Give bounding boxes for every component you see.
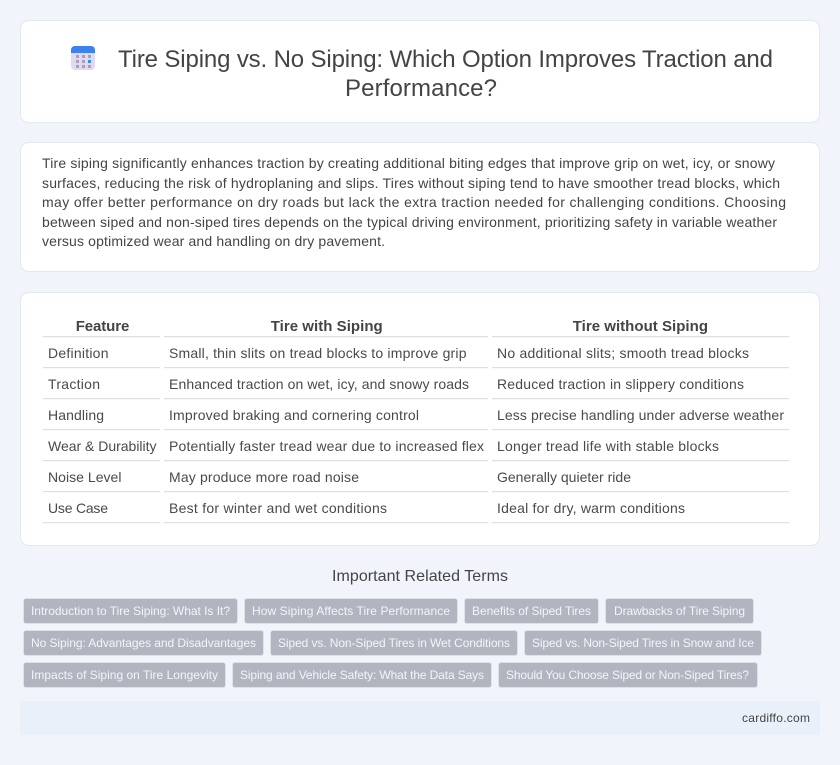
tag: performance: How Siping Affects Tire Performance [252, 604, 450, 618]
row: noise level [48, 469, 631, 485]
title: Performance? [345, 75, 497, 102]
intro paragraph: Tire siping significantly enhances traction by creating additional biting edges that improve grip on wet, icy, or snowy [42, 155, 775, 171]
row: noise level: Generally quieter ride [497, 469, 631, 485]
tag: drawbacks [606, 598, 754, 624]
row: wear and durability: Potentially faster tread wear due to increased flex [169, 438, 484, 454]
row: definition: No additional slits; smooth tread blocks [497, 345, 749, 361]
tag: no siping: No Siping: Advantages and Disadvantages [31, 636, 256, 650]
table header row: Feature [76, 318, 129, 335]
panel: intro text [20, 142, 820, 272]
icon: calendar [71, 46, 95, 70]
intro paragraph: surfaces, reducing the risk of hydroplaning and slips. Tires without siping tend to have smoother tread blocks, which [42, 175, 780, 191]
row: noise level: May produce more road noise [169, 469, 359, 485]
table header row: Tire without Siping [573, 318, 708, 335]
tag: snow and ice: Siped vs. Non-Siped Tires in Snow and Ice [532, 636, 754, 650]
tag: wet conditions [270, 630, 518, 656]
tag: wet conditions: Siped vs. Non-Siped Tires in Wet Conditions [278, 636, 510, 650]
title: Tire Siping vs. No Siping: Which Option Improves Traction and [118, 46, 773, 73]
row: definition [48, 345, 749, 361]
table header row [76, 318, 708, 335]
intro paragraph: between siped and non-siped tires depends on the typical driving environment, prioritizing safety in variable weather [42, 214, 777, 230]
intro paragraph [42, 155, 786, 249]
row: handling [48, 407, 784, 423]
panel: title header [20, 20, 820, 122]
tag: performance [244, 598, 458, 624]
row: definition: Small, thin slits on tread blocks to improve grip [169, 345, 467, 361]
row: handling: Less precise handling under adverse weather [497, 407, 784, 423]
intro paragraph: versus optimized wear and handling on dry pavement. [42, 233, 385, 249]
row: use case: Ideal for dry, warm conditions [497, 500, 685, 516]
row: traction [48, 376, 744, 392]
row: wear and durability: Longer tread life with stable blocks [497, 438, 719, 454]
row: use case: Best for winter and wet conditions [169, 500, 387, 516]
tag: longevity: Impacts of Siping on Tire Longevity [31, 668, 218, 682]
tag: benefits [464, 598, 598, 624]
footer bar: cardiffo.com [742, 711, 810, 725]
row: traction: Traction [48, 376, 100, 392]
row: wear and durability [48, 438, 719, 454]
tag: safety: Siping and Vehicle Safety: What the Data Says [240, 668, 484, 682]
title [118, 46, 773, 102]
table header row: Tire with Siping [271, 318, 383, 335]
row: definition: Definition [48, 345, 108, 361]
row: traction: Enhanced traction on wet, icy, and snowy roads [169, 376, 469, 392]
footer bar [20, 701, 820, 735]
tag: benefits: Benefits of Siped Tires [472, 604, 591, 618]
row: traction: Reduced traction in slippery conditions [497, 376, 744, 392]
tag: introduction: Introduction to Tire Siping: What Is It? [31, 604, 230, 618]
tag: no siping [24, 630, 264, 656]
tag: snow and ice [524, 630, 762, 656]
row: wear and durability: Wear & Durability [48, 438, 156, 454]
tag: introduction [24, 598, 238, 624]
panel: comparison table [20, 292, 820, 546]
tag: longevity [24, 662, 226, 688]
tag: choose [498, 662, 758, 688]
row: noise level: Noise Level [48, 469, 122, 485]
intro paragraph: may offer better performance on dry roads but lack the extra traction needed for challenging conditions. Choosing [42, 194, 786, 210]
heading: important related terms: Important Related Terms [332, 568, 508, 585]
row: use case [48, 500, 685, 516]
related term tags [24, 598, 762, 688]
tag: safety [232, 662, 492, 688]
row: handling: Improved braking and cornering control [169, 407, 419, 423]
row: use case: Use Case [48, 500, 108, 516]
tag: choose: Should You Choose Siped or Non-Siped Tires? [506, 668, 749, 682]
row: handling: Handling [48, 407, 104, 423]
tag: drawbacks: Drawbacks of Tire Siping [614, 604, 745, 618]
